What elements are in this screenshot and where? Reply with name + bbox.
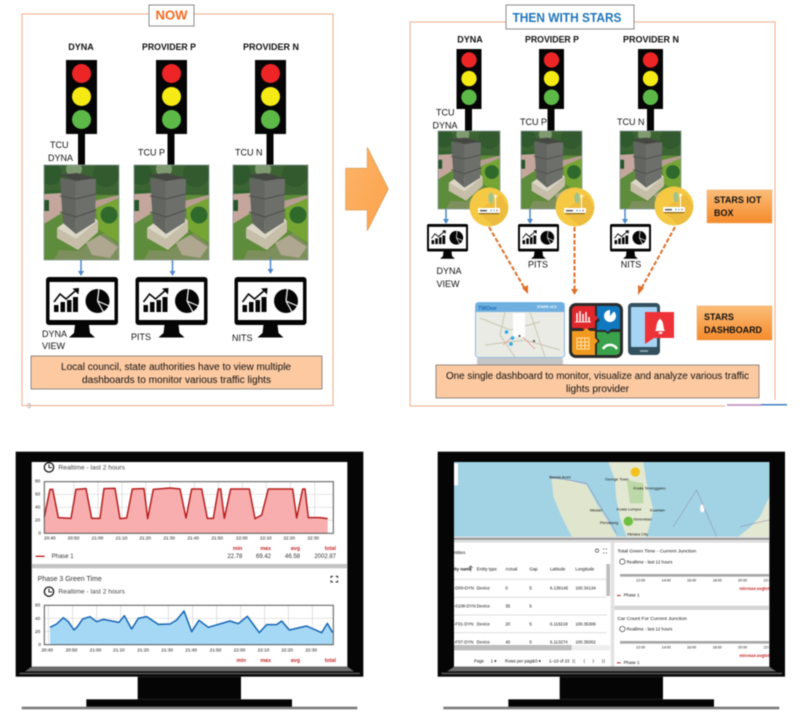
label: stars iot box bbox=[707, 190, 772, 223]
table: entities: -0108-DYN bbox=[454, 604, 476, 609]
callout: now: dashboards to monitor various traffic lights bbox=[82, 375, 271, 386]
table: entities: Device bbox=[477, 622, 490, 627]
map bbox=[454, 462, 769, 537]
column: provider p: TCU P bbox=[138, 148, 165, 158]
table: entities: 100.35002 bbox=[575, 640, 596, 645]
chart: phase 1: 20 bbox=[35, 518, 41, 523]
panel: now bbox=[22, 5, 333, 410]
column: dyna: DYNA bbox=[436, 266, 462, 276]
chart: phase 3 green time: 22:00 bbox=[234, 647, 246, 652]
column: dyna: DYNA bbox=[457, 34, 483, 44]
map: Seremban bbox=[633, 516, 652, 521]
chart: phase 1: 22:30 bbox=[307, 535, 319, 540]
chart: phase 3 green time: total bbox=[325, 658, 337, 664]
map: Kuala Terengganu bbox=[633, 486, 666, 491]
panel: car count: Car Count For Current Junction bbox=[617, 616, 687, 622]
chart: phase 3 green time: min bbox=[237, 658, 246, 664]
monitor: map dashboard bbox=[438, 452, 785, 709]
chart: phase 1: 22:00 bbox=[236, 535, 248, 540]
column: provider n: NITS bbox=[621, 260, 641, 270]
chart: phase 1: 69.42 bbox=[256, 554, 272, 560]
table: entities: 6.113274 bbox=[550, 640, 568, 645]
column: provider n: TCU N bbox=[617, 117, 644, 127]
chart: phase 3 green time: 0 bbox=[38, 642, 41, 647]
table: entities: Gap bbox=[529, 566, 538, 571]
label: stars dashboard: STARS bbox=[704, 312, 734, 322]
dashboard screenshot: TMOne bbox=[478, 306, 497, 312]
table: entities: ⟩⟩ bbox=[602, 658, 605, 663]
chart: phase 1: 20:50 bbox=[68, 535, 80, 540]
column: dyna: TCU bbox=[436, 108, 454, 118]
icon: puzzle dashboard bbox=[569, 303, 623, 358]
chart: phase 1 bbox=[35, 463, 337, 560]
panel: total green time: max bbox=[747, 586, 757, 591]
table: entities: Device bbox=[477, 640, 490, 645]
column: dyna: DYNA bbox=[48, 153, 73, 163]
chart: phase 1: 22:20 bbox=[283, 535, 295, 540]
panel: car count: max bbox=[747, 653, 757, 658]
table: entities: Rows per page bbox=[505, 658, 535, 663]
panel: car count: min bbox=[739, 653, 747, 658]
column: provider n bbox=[610, 34, 694, 270]
chart: phase 3 green time: 40 bbox=[35, 616, 41, 621]
pasted image fragment bbox=[725, 400, 788, 409]
column: provider n bbox=[229, 42, 308, 343]
callout: stars bbox=[436, 365, 759, 398]
label: stars iot box: STARS IOT bbox=[714, 195, 762, 205]
chart: phase 3 green time: 21:30 bbox=[161, 647, 173, 652]
chart: phase 3 green time: Realtime - last 2 hours bbox=[58, 588, 126, 595]
chart: phase 1: 40 bbox=[35, 505, 41, 510]
table: entities: ⟩ bbox=[592, 658, 594, 663]
chart: phase 3 green time: 22:10 bbox=[258, 647, 270, 652]
callout: now: Local council, state authorities have to view multiple bbox=[61, 362, 291, 373]
panel: total green time: 14:00 bbox=[662, 578, 671, 582]
panel: then with stars bbox=[410, 5, 788, 409]
panel: car count: Phase 1 bbox=[624, 660, 640, 665]
panel: total green time bbox=[617, 549, 773, 598]
table: entities: 0 bbox=[529, 640, 532, 645]
table: entities: 5 bbox=[529, 586, 532, 591]
chart: phase 1: avg bbox=[291, 546, 300, 552]
panel: total green time: 12:00 bbox=[636, 578, 645, 582]
table: entities: 5 bbox=[529, 622, 532, 627]
dashboard screenshot: STARS v2.0 bbox=[537, 305, 556, 309]
chart: phase 1: Realtime - last 2 hours bbox=[58, 464, 126, 471]
panel: car count: Realtime - last 12 hours bbox=[627, 626, 672, 631]
column: provider p: PITS bbox=[528, 260, 548, 270]
panel: total green time: min bbox=[739, 586, 747, 591]
column: dyna: DYNA bbox=[42, 329, 67, 339]
panel: total green time: avg bbox=[757, 586, 764, 591]
chart: phase 1: 21:20 bbox=[139, 535, 151, 540]
chart: phase 1: max bbox=[260, 546, 271, 552]
label: stars iot box: BOX bbox=[714, 208, 734, 218]
map: Banda Aceh bbox=[549, 475, 571, 480]
table: entities: 20 bbox=[505, 622, 511, 627]
chart: phase 1: 21:30 bbox=[163, 535, 175, 540]
table: entities: ity name bbox=[454, 566, 472, 571]
table: entities: 10 ▾ bbox=[533, 658, 541, 663]
table: entities: Device bbox=[477, 586, 490, 591]
column: dyna: DYNA bbox=[432, 120, 458, 130]
column: dyna: VIEW bbox=[436, 279, 460, 289]
panel: car count: 14:00 bbox=[662, 645, 671, 649]
panel: car count: 22:00 bbox=[764, 645, 773, 649]
panel: total green time: Realtime - last 12 hours bbox=[627, 559, 672, 564]
chart: phase 1: 20:40 bbox=[44, 535, 56, 540]
callout: now bbox=[31, 356, 322, 389]
page number: 3 bbox=[27, 403, 31, 410]
chart: phase 3 green time: 21:40 bbox=[185, 647, 197, 652]
chart: phase 1: total bbox=[325, 546, 337, 552]
table: entities: -F01-DYN bbox=[454, 622, 473, 627]
column: dyna: DYNA bbox=[68, 42, 94, 52]
table: entities: ⟨ bbox=[583, 658, 585, 663]
column: provider p: PITS bbox=[131, 332, 151, 342]
column: provider p: PROVIDER P bbox=[525, 34, 579, 44]
chart: phase 3 green time: 22:20 bbox=[281, 647, 293, 652]
chart: phase 3 green time: 22:30 bbox=[305, 647, 317, 652]
map: Melaka City bbox=[627, 532, 648, 537]
chart: phase 1: 2002.87 bbox=[314, 554, 337, 560]
heading: then with stars bbox=[506, 5, 634, 29]
chart: phase 3 green time: 60 bbox=[35, 603, 41, 608]
column: dyna bbox=[427, 34, 508, 289]
map: Pematang bbox=[600, 520, 618, 525]
chart: phase 1: Phase 1 bbox=[52, 554, 74, 560]
column: provider n: PROVIDER N bbox=[243, 42, 299, 52]
chart: phase 3 green time: 21:10 bbox=[113, 647, 125, 652]
heading: then with stars: THEN WITH STARS bbox=[512, 11, 622, 25]
chart: phase 3 green time: avg bbox=[291, 658, 300, 664]
chart: phase 3 green time: 20:40 bbox=[41, 647, 53, 652]
panel: total green time: 18:00 bbox=[713, 578, 722, 582]
label: stars dashboard: DASHBOARD bbox=[704, 325, 762, 335]
chart: phase 3 green time: 21:50 bbox=[210, 647, 222, 652]
panel: total green time: Phase 1 bbox=[624, 593, 640, 598]
table: entities: -D00-DYN bbox=[454, 586, 474, 591]
chart: phase 1: 21:10 bbox=[116, 535, 128, 540]
map: Kuantan bbox=[650, 507, 665, 512]
column: provider n: PROVIDER N bbox=[623, 34, 679, 44]
table: entities: Actual bbox=[505, 566, 517, 571]
chart: phase 3 green time: 21:00 bbox=[90, 647, 102, 652]
table: entities: Entity type bbox=[477, 566, 497, 571]
dashboard screenshot bbox=[476, 302, 564, 366]
chart: phase 1: 21:50 bbox=[211, 535, 223, 540]
table: entities: 5 bbox=[529, 604, 532, 609]
chart: phase 1: 21:00 bbox=[92, 535, 104, 540]
table: entities: Longitude bbox=[575, 566, 595, 571]
callout: stars: lights provider bbox=[566, 384, 630, 395]
chart: phase 3 green time: 20:50 bbox=[66, 647, 78, 652]
chart: phase 3 green time: max bbox=[260, 658, 271, 664]
heading: now: NOW bbox=[156, 8, 188, 22]
column: provider p: PROVIDER P bbox=[142, 42, 196, 52]
column: dyna: VIEW bbox=[42, 341, 66, 351]
chart: phase 3 green time: 21:20 bbox=[137, 647, 149, 652]
arrows: iot box to dashboard bbox=[489, 227, 675, 295]
panel: total green time: 20:00 bbox=[738, 578, 747, 582]
arrow: now to then bbox=[346, 147, 388, 231]
panel: total green time: Total Green Time - Current Junction bbox=[617, 549, 697, 555]
monitor: phase charts bbox=[16, 452, 363, 709]
table: entities: 35 bbox=[505, 604, 511, 609]
label: stars dashboard bbox=[697, 306, 772, 340]
map: George Town bbox=[605, 477, 629, 482]
table: entities: 6.139145 bbox=[550, 586, 569, 591]
table: entities: Page bbox=[474, 658, 485, 663]
table: entities: -F07-DYN bbox=[454, 640, 473, 645]
chart: phase 3 green time bbox=[35, 576, 338, 664]
table: entities: 6.118218 bbox=[550, 622, 568, 627]
chart: phase 1: 21:40 bbox=[187, 535, 199, 540]
chart: phase 1: min bbox=[233, 546, 242, 552]
panel: car count: total bbox=[764, 653, 773, 658]
chart: phase 3 green time: Phase 3 Green Time bbox=[38, 576, 102, 583]
table: entities: ⟨⟨ bbox=[572, 658, 576, 663]
panel: car count: 18:00 bbox=[713, 645, 722, 649]
column: provider n: NITS bbox=[232, 333, 253, 343]
panel: car count bbox=[617, 616, 773, 665]
map: Medan bbox=[590, 507, 602, 512]
table: entities: ntities bbox=[454, 550, 465, 555]
column: provider n: TCU N bbox=[235, 148, 262, 158]
chart: phase 1: 80 bbox=[35, 479, 41, 484]
table: entities: 100.35306 bbox=[575, 622, 596, 627]
column: provider p bbox=[130, 42, 209, 342]
chart: phase 1: 22:10 bbox=[260, 535, 272, 540]
map: Kuala Lumpur bbox=[617, 507, 642, 512]
table: entities: Latitude bbox=[550, 566, 566, 571]
column: dyna bbox=[40, 42, 119, 351]
column: provider p: TCU P bbox=[520, 117, 547, 127]
chart: phase 1: 0 bbox=[38, 531, 41, 536]
table: entities: 1–10 of 23 bbox=[549, 658, 570, 663]
table: entities: 100.34134 bbox=[575, 586, 596, 591]
panel: car count: avg bbox=[757, 653, 764, 658]
icon: phone alert bbox=[628, 303, 674, 355]
table: entities: 40 bbox=[505, 640, 511, 645]
panel: total green time: total bbox=[764, 586, 773, 591]
table: entities: 1 ▾ bbox=[491, 658, 496, 663]
panel: car count: 12:00 bbox=[636, 645, 645, 649]
table: entities: Device bbox=[477, 604, 490, 609]
column: dyna: TCU bbox=[50, 140, 68, 150]
panel: total green time: 16:00 bbox=[687, 578, 696, 582]
table: entities: 0 bbox=[505, 586, 508, 591]
panel: car count: 20:00 bbox=[738, 645, 747, 649]
chart: phase 3 green time: 20 bbox=[35, 629, 41, 634]
table: entities bbox=[454, 543, 611, 667]
panel: car count: 16:00 bbox=[687, 645, 696, 649]
column: provider p bbox=[518, 34, 594, 270]
chart: phase 1: 22.78 bbox=[227, 554, 243, 560]
chart: phase 1: 60 bbox=[35, 492, 41, 497]
chart: phase 1: 46.58 bbox=[285, 554, 301, 560]
heading: now bbox=[149, 5, 194, 26]
callout: stars: One single dashboard to monitor, visualize and analyze various traffic bbox=[446, 371, 749, 382]
panel: total green time: 22:00 bbox=[764, 578, 773, 582]
